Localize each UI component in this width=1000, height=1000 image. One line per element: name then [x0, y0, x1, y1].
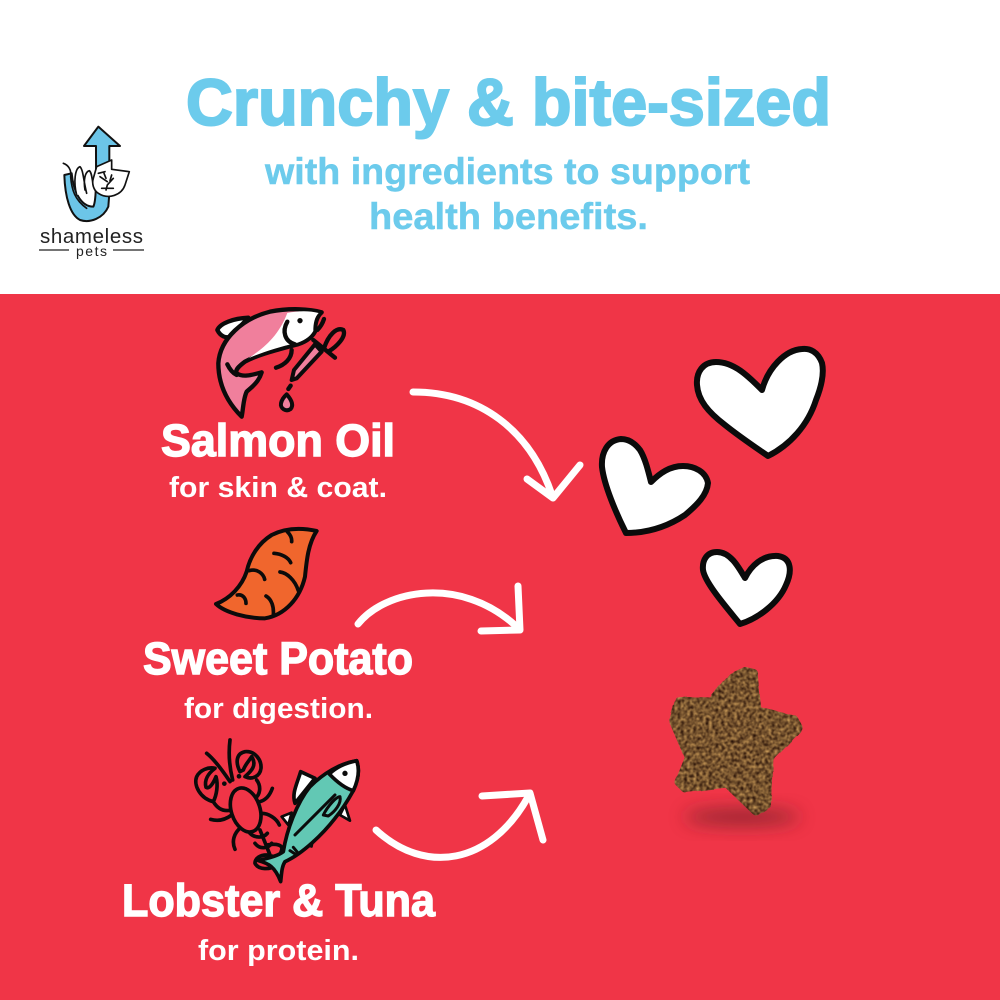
icon: small heart	[703, 552, 790, 624]
arrow: salmon oil to hearts	[413, 392, 580, 498]
salmon head and belly	[248, 311, 319, 358]
ingredient: Sweet Potato label: Sweet Potato	[143, 633, 413, 684]
background: red panel	[0, 294, 1000, 1000]
subtitle line 2: health benefits.	[369, 196, 648, 237]
background: white header	[0, 0, 1000, 294]
tuna head	[329, 761, 358, 791]
icon: salmon with dropper	[217, 309, 344, 417]
salmon body	[218, 309, 322, 417]
lobster	[196, 740, 282, 869]
ingredient: protein text: for protein.	[198, 935, 359, 967]
tuna body	[258, 761, 358, 882]
icon: large heart	[697, 349, 823, 456]
subtitle line 1: with ingredients to support	[264, 151, 750, 192]
icon: arrow and cat	[63, 127, 129, 221]
ingredient: digestion text: for digestion.	[184, 693, 373, 725]
icon: sweet potato	[216, 529, 317, 618]
ingredient: Lobster & Tuna label: Lobster & Tuna	[122, 875, 436, 926]
logo wordmark: shameless	[40, 225, 143, 248]
logo: shameless pets	[39, 127, 144, 259]
tuna fins	[294, 772, 315, 803]
ingredient: Salmon Oil label: Salmon Oil	[161, 415, 395, 466]
title: Crunchy & bite-sized	[186, 65, 831, 139]
icon: middle heart	[602, 439, 708, 533]
arrow: sweet potato to hearts	[358, 586, 520, 631]
salmon fin	[217, 318, 248, 337]
kibble shadow	[684, 809, 800, 825]
star-shaped kibble	[674, 671, 798, 811]
ingredient: skin and coat text: for skin & coat.	[169, 472, 387, 504]
arrow: lobster and tuna to kibble	[376, 793, 543, 857]
dropper	[281, 329, 344, 410]
logo sub-wordmark: pets	[76, 243, 107, 259]
icon: lobster and tuna	[196, 740, 358, 882]
